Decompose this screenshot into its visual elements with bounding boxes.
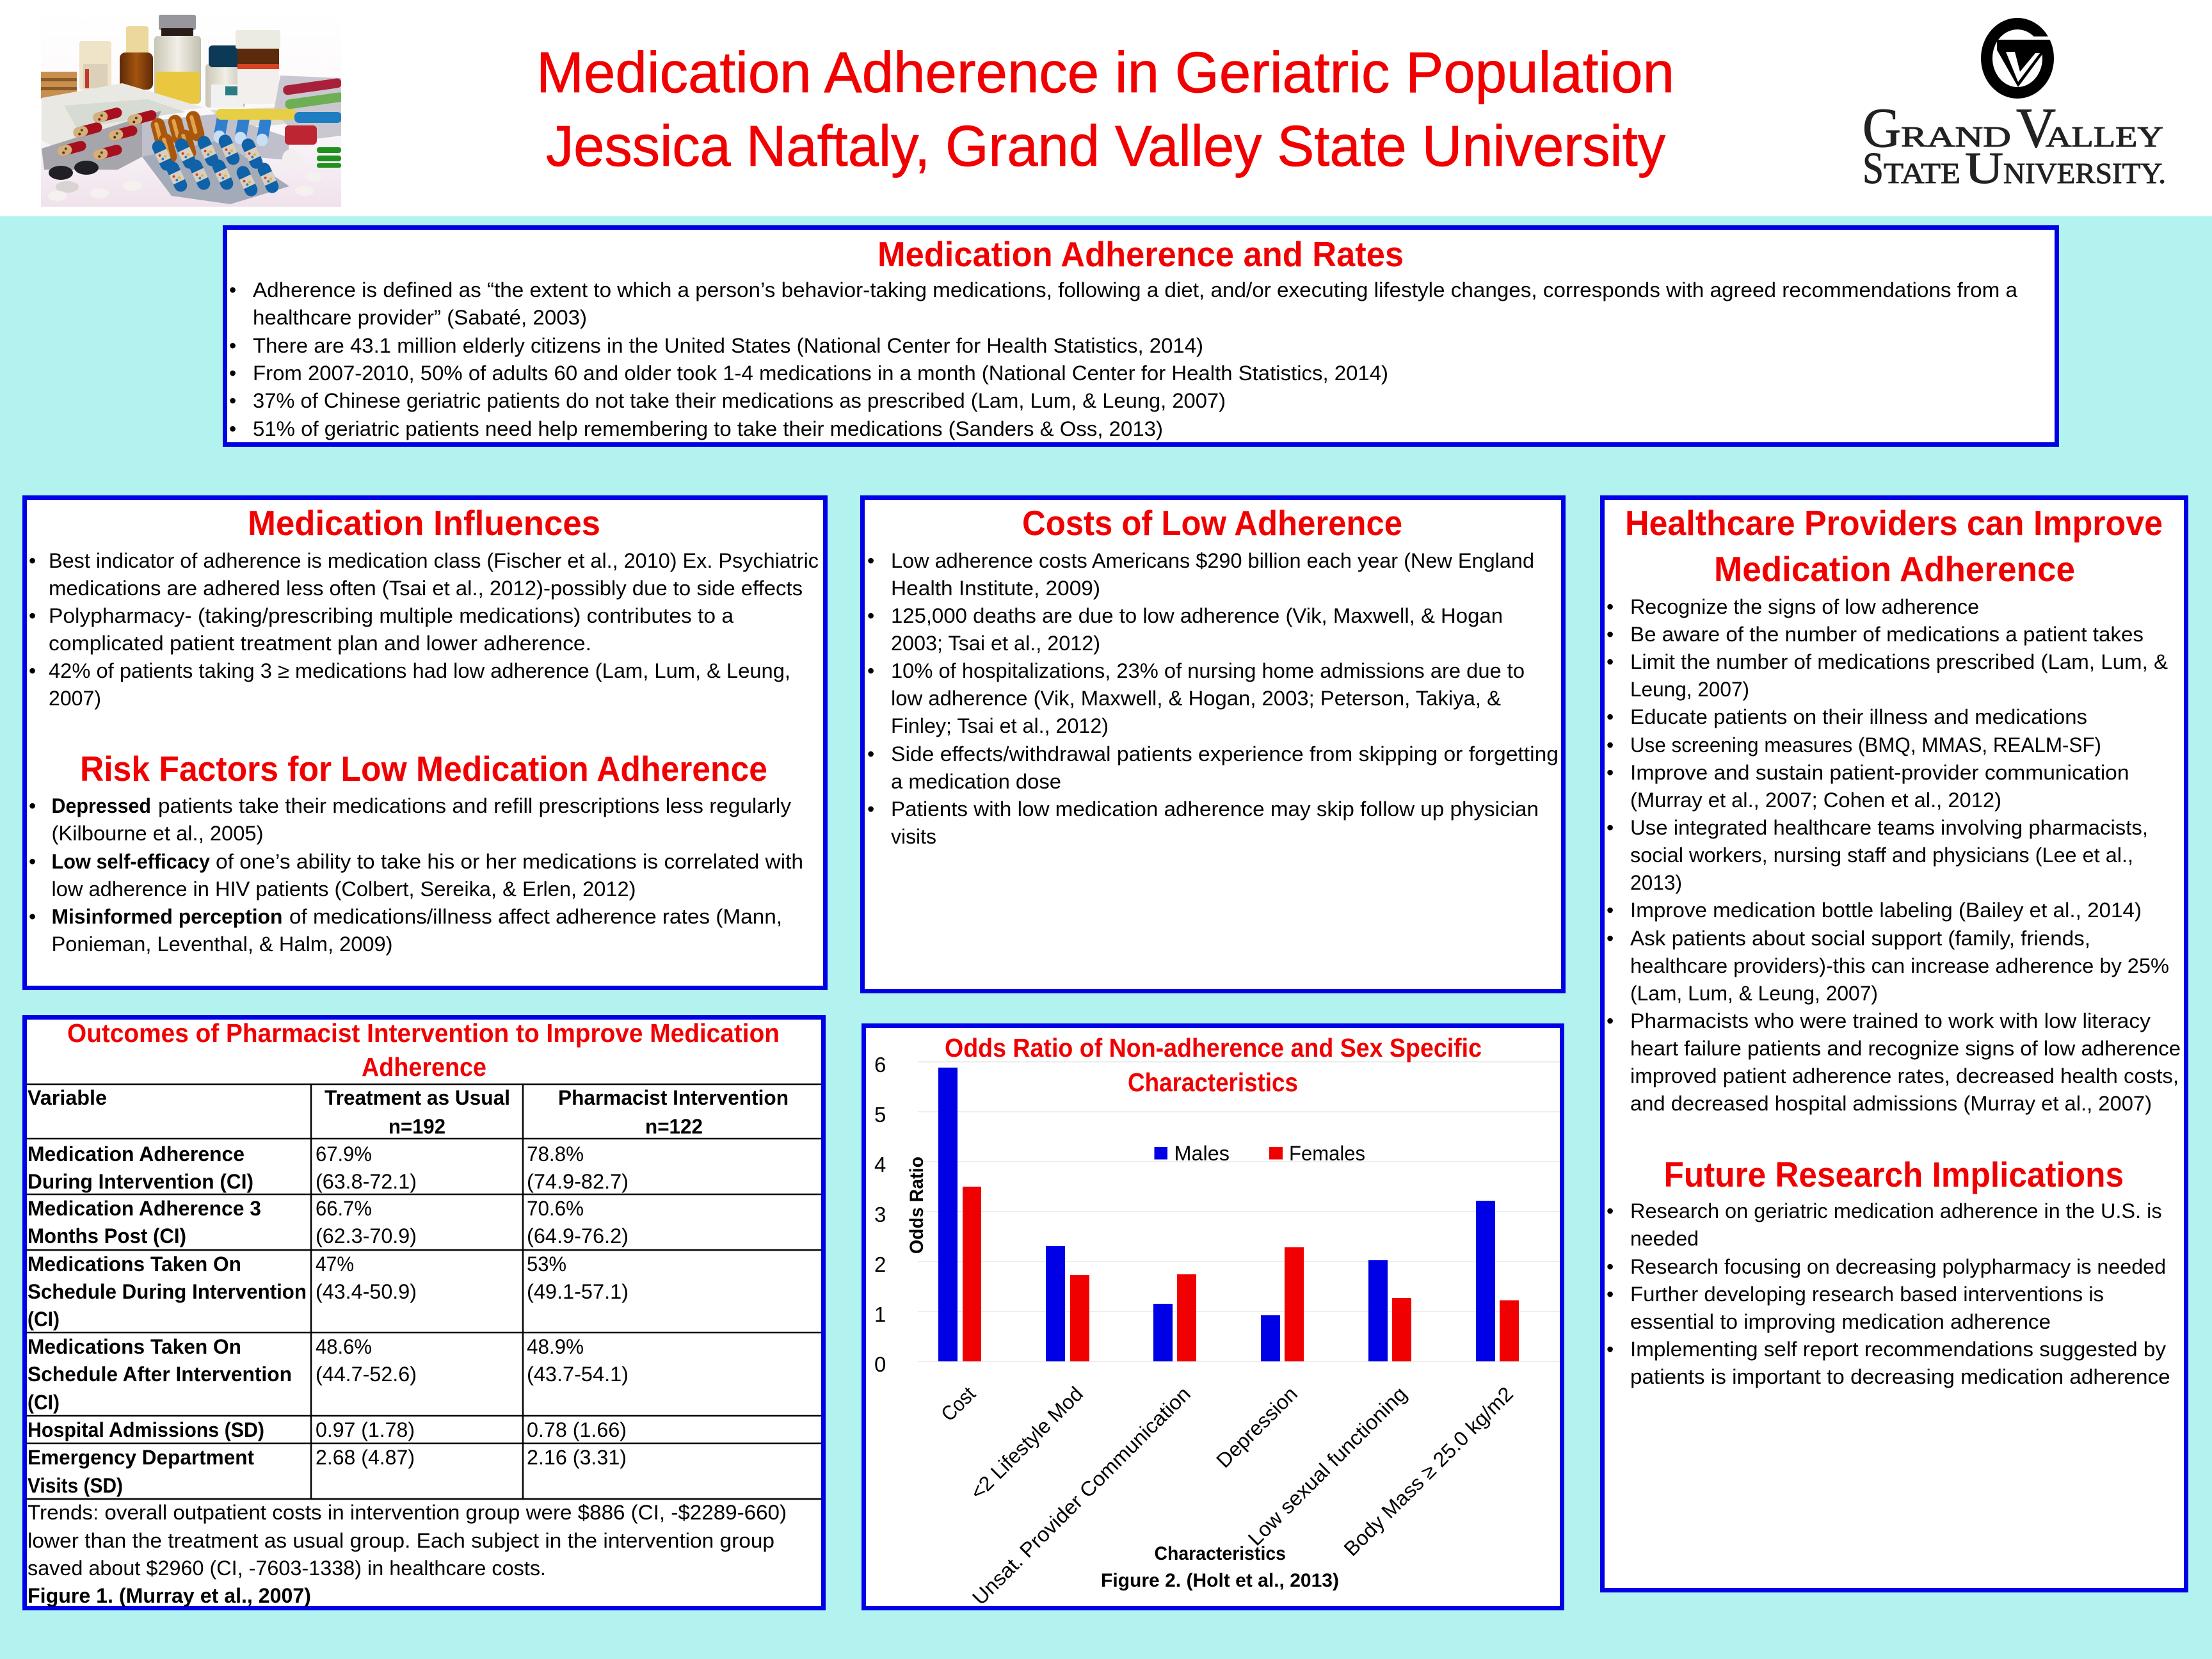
bullet list: risk factors: • <box>29 850 36 873</box>
bullet list: future research: needed <box>1630 1227 1699 1250</box>
icon: Grand Valley State University logo: RAND <box>1901 120 2011 153</box>
bullet list: risk factors: (Kilbourne et al., 2005) <box>51 822 264 845</box>
y axis labels <box>874 1053 886 1376</box>
bullet list: 51% of geriatric patients need help remembering to take their medications (Sanders & Oss, 2013) <box>253 417 1163 440</box>
bullet list: provider actions: • <box>1607 733 1614 757</box>
bullet list: influences: medications are adhered less often (Tsai et al., 2012)-possibly due to side effects <box>49 577 803 600</box>
heading: Costs of Low Adherence <box>1022 503 1402 543</box>
bullet list: • <box>229 389 236 412</box>
trends note: saved about $2960 (CI, -7603-1338) in healthcare costs. <box>28 1557 546 1580</box>
bullet list: risk factors: of one’s ability to take his or her medications is correlated with <box>216 850 803 873</box>
icon: Grand Valley State University logo: U <box>1965 144 2003 193</box>
chart heading <box>945 1033 1482 1097</box>
table header row <box>28 1086 789 1138</box>
y axis labels: 3 <box>874 1203 886 1226</box>
table row: on schedule after intervention <box>28 1335 629 1414</box>
x axis title: Characteristics <box>1155 1543 1286 1564</box>
table row: on schedule during intervention: 47% <box>316 1253 354 1276</box>
trends note <box>28 1501 787 1580</box>
bullet list: provider actions: heart failure patients and recognize signs of low adherence <box>1630 1037 2181 1060</box>
bullet list: 10% of hospitalizations, 23% of nursing home admissions are due to <box>891 659 1525 682</box>
bullet list: • <box>867 659 874 682</box>
bullet list: provider actions: Be aware of the number of medications a patient takes <box>1630 623 2144 646</box>
x axis category labels: Depression <box>1212 1382 1302 1472</box>
icon: medication photo illustration <box>41 13 344 207</box>
icon: Grand Valley State University logo: S <box>1863 144 1884 193</box>
table heading: Outcomes of Pharmacist Intervention to Improve Medication <box>67 1018 780 1048</box>
bullet list: provider actions: Use screening measures (BMQ, MMAS, REALM-SF) <box>1630 733 2101 757</box>
bullet list: provider actions: Improve and sustain patient-provider communication <box>1630 761 2129 784</box>
x axis category labels: Unsat. Provider Communication <box>968 1382 1195 1609</box>
table row: adherence during intervention: During Intervention (CI) <box>28 1170 253 1193</box>
table row: emergency department visits <box>28 1446 627 1497</box>
bullet list: Finley; Tsai et al., 2012) <box>891 714 1109 737</box>
bullet list: future research: Further developing research based interventions is <box>1630 1283 2104 1306</box>
table row: on schedule during intervention: (43.4-50.9) <box>316 1280 417 1303</box>
bullet list: risk factors: Misinformed perception <box>51 905 283 928</box>
bullet list: provider actions: Pharmacists who were trained to work with low literacy <box>1630 1009 2151 1032</box>
table row: adherence during intervention: Medication Adherence <box>28 1142 244 1166</box>
bullet list: • <box>229 417 236 440</box>
y axis labels: 6 <box>874 1053 886 1077</box>
bullet list: • <box>867 549 874 572</box>
panel: Costs of Low Adherence <box>863 498 1563 991</box>
table row: adherence during intervention: (74.9-82.7) <box>527 1170 629 1193</box>
panel: Outcomes of Pharmacist Intervention table <box>24 1018 823 1608</box>
bullet list: provider actions: improved patient adherence rates, decreased health costs, <box>1630 1064 2179 1087</box>
bullet list: 125,000 deaths are due to low adherence (Vik, Maxwell, & Hogan <box>891 604 1503 627</box>
y axis labels: 2 <box>874 1253 886 1276</box>
table row: adherence 3 months post: Medication Adherence 3 <box>28 1197 261 1220</box>
table row: adherence 3 months post: 66.7% <box>316 1197 372 1220</box>
bullet list: provider actions: • <box>1607 650 1614 673</box>
x axis category labels <box>936 1382 1518 1609</box>
table row: on schedule during intervention: (49.1-57.1) <box>527 1280 629 1303</box>
bullet list: risk factors: • <box>29 794 36 817</box>
trends note: Trends: overall outpatient costs in intervention group were $886 (CI, -$2289-660) <box>28 1501 787 1524</box>
title: Jessica Naftaly, Grand Valley State University <box>546 115 1665 179</box>
table row: on schedule during intervention: (CI) <box>28 1308 60 1331</box>
table row: adherence 3 months post: 70.6% <box>527 1197 584 1220</box>
table row: on schedule after intervention: (CI) <box>28 1391 60 1414</box>
bullet list: future research: Research on geriatric medication adherence in the U.S. is <box>1630 1199 2162 1222</box>
title: Medication Adherence in Geriatric Population <box>536 41 1674 105</box>
table grid <box>26 1084 822 1499</box>
bullet list <box>867 549 1559 848</box>
panel: Odds Ratio chart <box>864 1025 1562 1609</box>
bullet list: future research: Research focusing on decreasing polypharmacy is needed <box>1630 1255 2166 1278</box>
table row: adherence 3 months post: Months Post (CI) <box>28 1224 186 1247</box>
bullet list: influences: 42% of patients taking 3 ≥ medications had low adherence (Lam, Lum, & Leung, <box>49 659 790 682</box>
table row: emergency department visits: Emergency Department <box>28 1446 254 1469</box>
bullet list: provider actions: Use integrated healthcare teams involving pharmacists, <box>1630 816 2148 839</box>
chart heading: Odds Ratio of Non-adherence and Sex Specific <box>945 1033 1482 1062</box>
bullet list: From 2007-2010, 50% of adults 60 and older took 1-4 medications in a month (National Center for Health Statistics, 2014) <box>253 362 1388 385</box>
bullet list: provider actions: • <box>1607 705 1614 728</box>
table row: on schedule during intervention: 53% <box>527 1253 566 1276</box>
bullet list: • <box>867 604 874 627</box>
bullet list: low adherence (Vik, Maxwell, & Hogan, 2003; Peterson, Takiya, & <box>891 687 1501 710</box>
bullet list: influences: • <box>29 604 36 627</box>
table row: on schedule during intervention <box>28 1253 629 1331</box>
table row: adherence during intervention: 67.9% <box>316 1142 372 1166</box>
bar chart: odds ratio by sex <box>938 1068 1519 1361</box>
bullet list: provider actions: • <box>1607 899 1614 922</box>
table heading <box>67 1018 780 1082</box>
bullet list <box>229 278 2017 440</box>
bullet list: • <box>867 797 874 821</box>
bullet list: • <box>229 362 236 385</box>
table row: hospital admissions: Hospital Admissions (SD) <box>28 1418 264 1441</box>
table row: adherence 3 months post: (62.3-70.9) <box>316 1224 417 1247</box>
bullet list: provider actions: Improve medication bottle labeling (Bailey et al., 2014) <box>1630 899 2142 922</box>
table row: on schedule after intervention: 48.6% <box>316 1335 372 1358</box>
bullet list: provider actions: • <box>1607 761 1614 784</box>
bullet list: 37% of Chinese geriatric patients do not take their medications as prescribed (Lam, Lum, & Leung, 2007) <box>253 389 1226 412</box>
table header row: Treatment as Usual <box>325 1086 510 1109</box>
icon: Grand Valley State University logo: NIVERSITY. <box>2003 157 2166 189</box>
bullet list: influences: 2007) <box>49 687 101 710</box>
table row: adherence during intervention: (63.8-72.1) <box>316 1170 417 1193</box>
bullet list: provider actions: • <box>1607 927 1614 950</box>
bullet list: healthcare provider” (Sabaté, 2003) <box>253 306 587 329</box>
panel: Healthcare Providers and Future Research <box>1603 498 2186 1590</box>
table row: on schedule after intervention: Schedule After Intervention <box>28 1363 292 1386</box>
y axis labels: 0 <box>874 1352 886 1376</box>
heading: Healthcare Providers: Healthcare Providers can Improve <box>1625 503 2163 543</box>
bullet list: provider actions: Ask patients about social support (family, friends, <box>1630 927 2090 950</box>
bullet list: visits <box>891 825 936 848</box>
y axis title: Odds Ratio <box>906 1157 927 1254</box>
bullet list: provider actions: • <box>1607 623 1614 646</box>
table row: adherence during intervention: 78.8% <box>527 1142 584 1166</box>
bullet list: Health Institute, 2009) <box>891 577 1100 600</box>
heading: Medication Influences: Medication Influences <box>248 503 600 543</box>
bullet list: a medication dose <box>891 770 1061 793</box>
bullet list: provider actions: (Lam, Lum, & Leung, 2007) <box>1630 982 1878 1005</box>
table header row: Pharmacist Intervention <box>558 1086 789 1109</box>
legend: Males <box>1174 1142 1230 1165</box>
legend: Females <box>1289 1142 1365 1165</box>
x axis category labels: Low sexual functioning <box>1244 1382 1411 1550</box>
bullet list: risk factors: patients take their medications and refill prescriptions less regularly <box>158 794 791 817</box>
bullet list: Adherence is defined as “the extent to which a person’s behavior-taking medications, following a diet, and/or executing lifestyle changes, corresponds with agreed recommendations from a <box>253 278 2017 301</box>
panel: Medication Adherence and Rates <box>225 228 2057 444</box>
icon: Grand Valley State University logo: TATE <box>1884 157 1960 189</box>
icon: Grand Valley State University logo <box>1863 24 2166 193</box>
table row: emergency department visits: 2.16 (3.31) <box>527 1446 627 1469</box>
heading: Medication Adherence and Rates <box>878 234 1404 274</box>
bullet list: risk factors: Ponieman, Leventhal, & Halm, 2009) <box>51 933 393 956</box>
table row: emergency department visits: Visits (SD) <box>28 1474 123 1497</box>
bullet list: future research <box>1607 1199 2170 1388</box>
bullet list: future research: • <box>1607 1283 1614 1306</box>
table row: adherence during intervention <box>28 1142 629 1193</box>
bullet list: provider actions: social workers, nursing staff and physicians (Lee et al., <box>1630 844 2133 867</box>
table header row: n=122 <box>645 1115 703 1138</box>
bullet list: • <box>229 278 236 301</box>
bullet list: provider actions: Leung, 2007) <box>1630 678 1749 701</box>
title <box>536 41 1674 179</box>
bullet list: Side effects/withdrawal patients experience from skipping or forgetting <box>891 742 1559 765</box>
heading: Risk Factors: Risk Factors for Low Medication Adherence <box>80 749 767 789</box>
bullet list: risk factors: of medications/illness affect adherence rates (Mann, <box>289 905 782 928</box>
bullet list: There are 43.1 million elderly citizens in the United States (National Center for Health Statistics, 2014) <box>253 334 1203 357</box>
trends note: lower than the treatment as usual group. Each subject in the intervention group <box>28 1529 774 1552</box>
bullet list: future research: • <box>1607 1255 1614 1278</box>
heading: Healthcare Providers <box>1625 503 2163 589</box>
table row: on schedule after intervention: Medications Taken On <box>28 1335 241 1358</box>
table row: on schedule during intervention: Schedule During Intervention <box>28 1280 307 1303</box>
table row: on schedule after intervention: (44.7-52.6) <box>316 1363 417 1386</box>
table row: hospital admissions: 0.78 (1.66) <box>527 1418 627 1441</box>
x axis category labels: Body Mass ≥ 25.0 kg/m2 <box>1339 1382 1518 1560</box>
header band <box>0 0 2212 216</box>
table row: on schedule during intervention: Medications Taken On <box>28 1253 241 1276</box>
y axis labels: 4 <box>874 1153 886 1176</box>
icon: Grand Valley State University logo: ALLEY <box>2046 120 2163 153</box>
bullet list: risk factors: • <box>29 905 36 928</box>
bullet list: influences: • <box>29 549 36 572</box>
bullet list: risk factors: Low self-efficacy <box>51 850 210 873</box>
bullet list: • <box>229 334 236 357</box>
bullet list: risk factors: low adherence in HIV patients (Colbert, Sereika, & Erlen, 2012) <box>51 878 636 901</box>
bullet list: provider actions: (Murray et al., 2007; Cohen et al., 2012) <box>1630 789 2001 812</box>
icon: Grand Valley State University logo: G <box>1863 97 1901 159</box>
bullet list: provider actions: healthcare providers)-this can increase adherence by 25% <box>1630 954 2169 977</box>
bullet list: provider actions: 2013) <box>1630 871 1682 894</box>
bullet list: future research: • <box>1607 1199 1614 1222</box>
bullet list: provider actions: • <box>1607 816 1614 839</box>
bullet list: risk factors <box>29 794 803 956</box>
x axis category labels: Cost <box>936 1382 980 1425</box>
bullet list: future research: essential to improving medication adherence <box>1630 1310 2051 1333</box>
bullet list: influences <box>29 549 819 710</box>
table row: adherence 3 months post <box>28 1197 629 1247</box>
panel: Medication Influences and Risk Factors <box>24 498 826 988</box>
bullet list: 2003; Tsai et al., 2012) <box>891 632 1100 655</box>
figure 2 caption: Figure 2. (Holt et al., 2013) <box>1101 1570 1339 1591</box>
heading: Healthcare Providers: Medication Adherence <box>1714 549 2075 589</box>
bullet list: future research: Implementing self report recommendations suggested by <box>1630 1338 2166 1361</box>
bullet list: influences: • <box>29 659 36 682</box>
table header row: Variable <box>28 1086 107 1109</box>
bullet list: future research: • <box>1607 1338 1614 1361</box>
icon: Grand Valley State University logo: V <box>2016 97 2056 159</box>
table row: hospital admissions: 0.97 (1.78) <box>316 1418 415 1441</box>
bullet list: influences: complicated patient treatment plan and lower adherence. <box>49 632 591 655</box>
heading: Future Research Implications: Future Research Implications <box>1664 1155 2124 1194</box>
bullet list: Low adherence costs Americans $290 billion each year (New England <box>891 549 1534 572</box>
bullet list: provider actions: Recognize the signs of low adherence <box>1630 595 1979 618</box>
table heading: Adherence <box>362 1052 486 1082</box>
table row: on schedule after intervention: (43.7-54.1) <box>527 1363 629 1386</box>
table row: adherence 3 months post: (64.9-76.2) <box>527 1224 629 1247</box>
bullet list: influences: Polypharmacy- (taking/prescribing multiple medications) contributes to a <box>49 604 733 627</box>
figure 1 caption: Figure 1. (Murray et al., 2007) <box>28 1584 311 1607</box>
bullet list: provider actions: • <box>1607 595 1614 618</box>
chart heading: Characteristics <box>1128 1068 1298 1097</box>
bullet list: influences: Best indicator of adherence is medication class (Fischer et al., 2010) Ex. Psychiatric <box>49 549 819 572</box>
y axis labels: 5 <box>874 1103 886 1126</box>
bullet list: provider actions: and decreased hospital admissions (Murray et al., 2007) <box>1630 1092 2152 1115</box>
bullet list: risk factors: Depressed <box>51 794 151 817</box>
bullet list: • <box>867 742 874 765</box>
y axis labels: 1 <box>874 1302 886 1326</box>
bullet list: provider actions: Educate patients on their illness and medications <box>1630 705 2087 728</box>
bullet list: Patients with low medication adherence may skip follow up physician <box>891 797 1539 821</box>
bullet list: provider actions: • <box>1607 1009 1614 1032</box>
x axis category labels: <2 Lifestyle Mod <box>966 1382 1087 1504</box>
table header row: n=192 <box>389 1115 445 1138</box>
bullet list: provider actions <box>1607 595 2181 1115</box>
table row: emergency department visits: 2.68 (4.87) <box>316 1446 415 1469</box>
table row: hospital admissions <box>28 1418 627 1441</box>
chart gridlines <box>918 1062 1560 1361</box>
bullet list: provider actions: Limit the number of medications prescribed (Lam, Lum, & <box>1630 650 2168 673</box>
table row: on schedule after intervention: 48.9% <box>527 1335 584 1358</box>
legend <box>1155 1142 1365 1165</box>
bullet list: future research: patients is important to decreasing medication adherence <box>1630 1365 2170 1388</box>
